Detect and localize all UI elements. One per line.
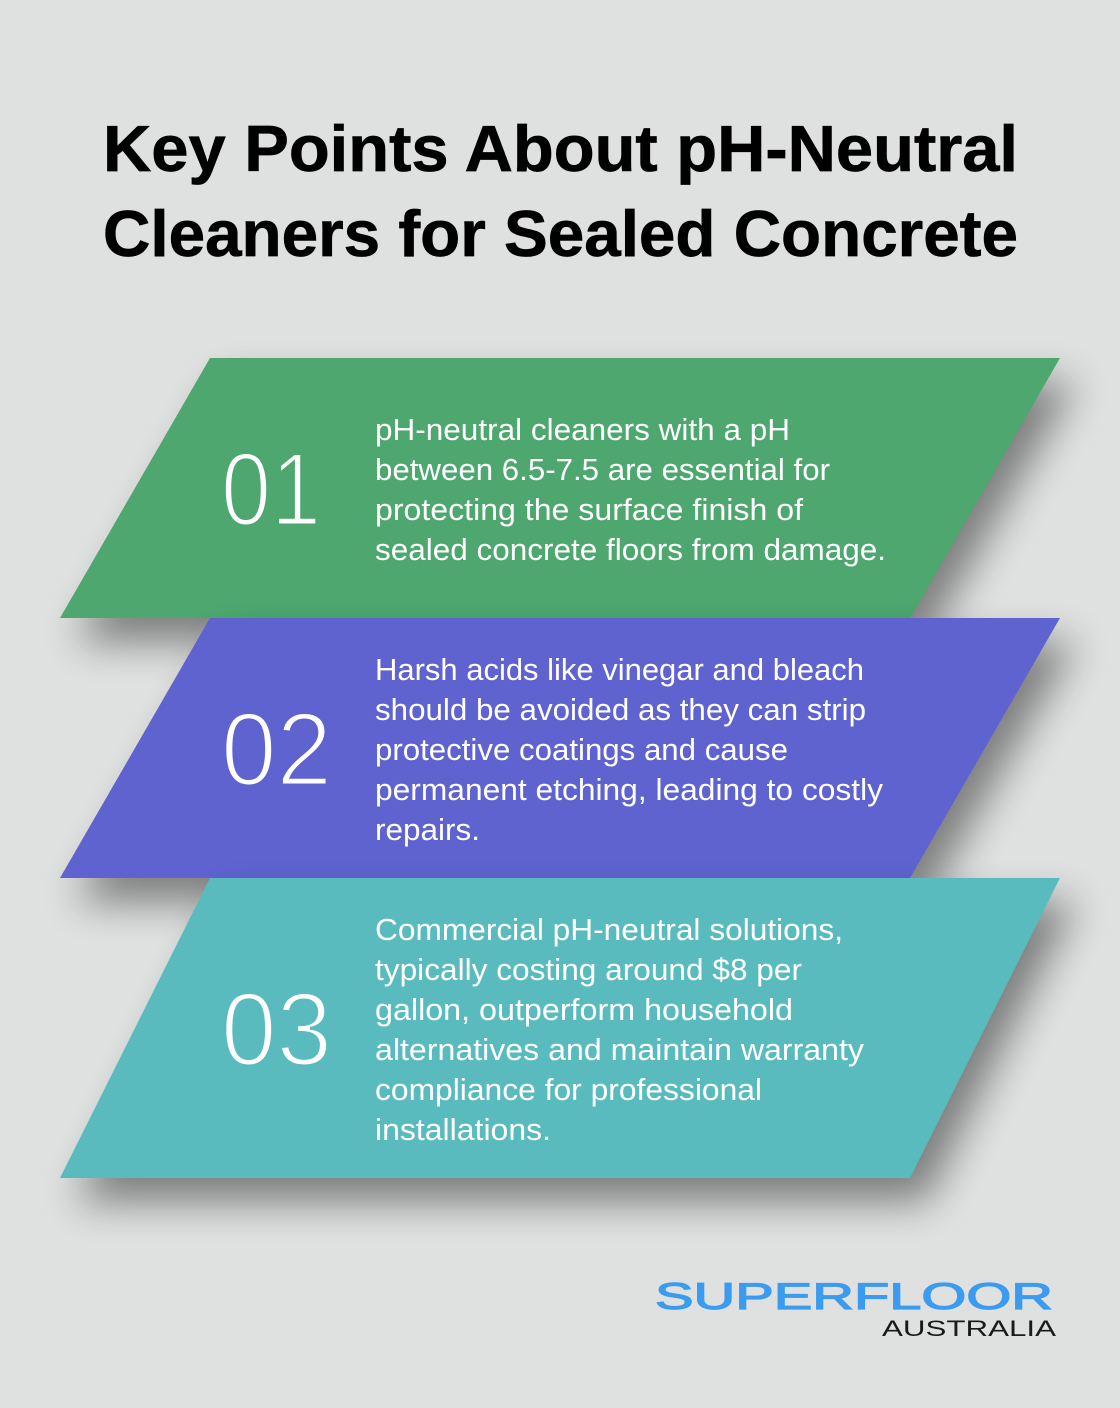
- text: point 01: pH-neutral cleaners with a pH: [375, 412, 790, 447]
- logo: Superfloor Australia: AUSTRALIA: [882, 1316, 1056, 1341]
- panel: point 03: [60, 878, 1076, 1202]
- number 01: 01: [221, 432, 321, 548]
- number 02: 02: [221, 692, 332, 808]
- text: point 02: permanent etching, leading to costly: [375, 772, 884, 807]
- text: point 03: gallon, outperform household: [375, 992, 793, 1027]
- text: point 03: alternatives and maintain warranty: [375, 1032, 865, 1067]
- text: point 01: [375, 412, 886, 567]
- title: Key Points About pH-Neutral: [103, 112, 1018, 185]
- title: Cleaners for Sealed Concrete: [103, 197, 1018, 270]
- text: point 03: [375, 912, 865, 1147]
- text: point 02: should be avoided as they can strip: [375, 692, 866, 727]
- text: point 01: protecting the surface finish of: [375, 492, 803, 527]
- logo: Superfloor Australia: SUPERFLOOR: [655, 1276, 1053, 1317]
- text: point 02: protective coatings and cause: [375, 732, 788, 767]
- text: point 01: between 6.5-7.5 are essential for: [375, 452, 830, 487]
- text: point 02: [375, 652, 884, 847]
- text: point 03: compliance for professional: [375, 1072, 762, 1107]
- text: point 02: repairs.: [375, 812, 480, 847]
- text: point 03: installations.: [375, 1112, 551, 1147]
- text: point 03: Commercial pH-neutral solutions,: [375, 912, 843, 947]
- logo: Superfloor Australia: [655, 1276, 1056, 1341]
- number 03: 03: [221, 972, 332, 1088]
- text: point 02: Harsh acids like vinegar and bleach: [375, 652, 864, 687]
- panel: point 01: [60, 358, 1076, 642]
- text: point 03: typically costing around $8 per: [375, 952, 802, 987]
- text: point 01: sealed concrete floors from damage.: [375, 532, 886, 567]
- title: [103, 112, 1018, 270]
- panel: point 02: [60, 618, 1076, 902]
